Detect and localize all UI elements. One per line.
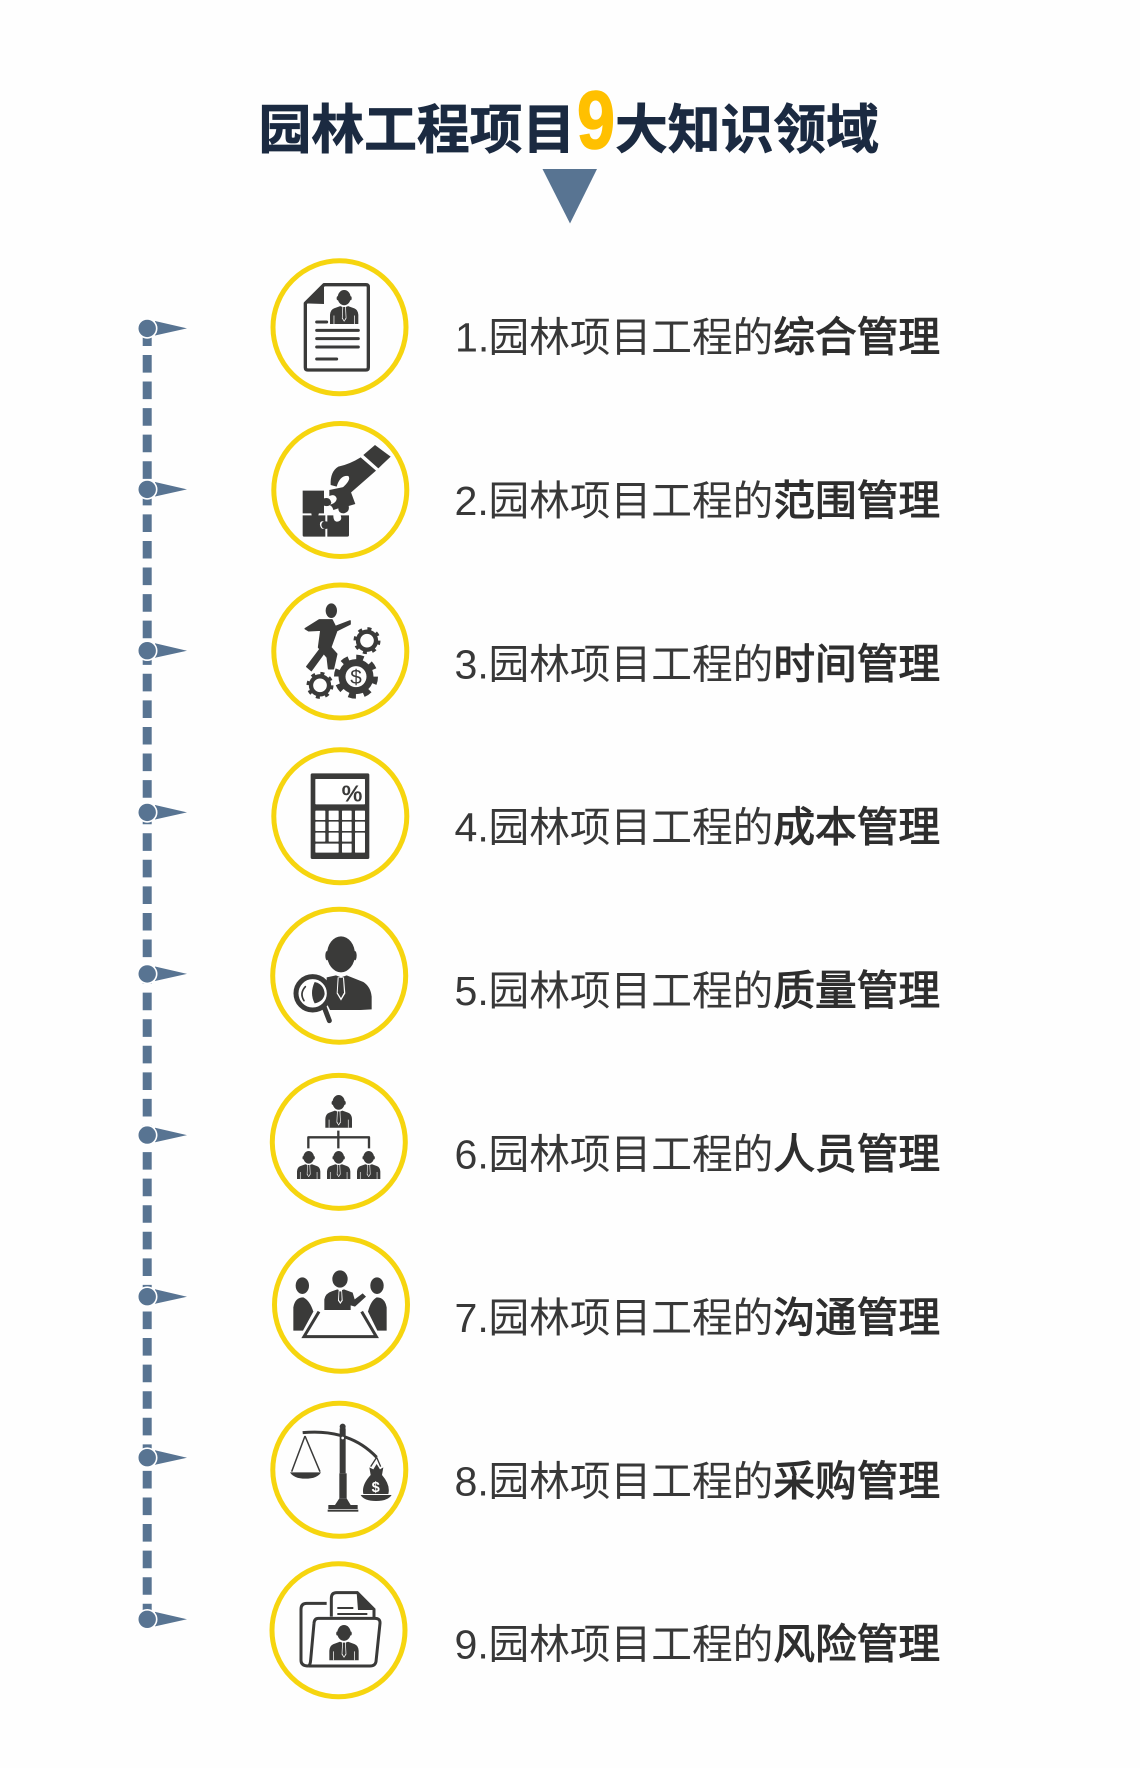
timeline [138, 319, 187, 1629]
list item 7: 园林项目工程的 [488, 1295, 773, 1341]
list item 5: 园林项目工程的 [488, 968, 773, 1014]
list item 6: 园林项目工程的 [488, 1132, 773, 1178]
title: 园林工程项目 [258, 88, 575, 164]
list item 8: 采购管理 [773, 1457, 940, 1504]
list item 7: 7. [454, 1295, 489, 1341]
list item 5: 质量管理 [773, 967, 940, 1014]
list item 6: 人员管理 [773, 1130, 940, 1178]
title: 大知识领域 [615, 88, 879, 164]
marker 5 [138, 964, 187, 983]
icon: team hierarchy [297, 1095, 380, 1179]
marker 2 [138, 480, 187, 499]
circle rings [272, 261, 408, 1697]
list item 1: 园林项目工程的 [488, 314, 773, 360]
title arrow [542, 169, 597, 224]
marker 3 [138, 641, 187, 660]
list item 5: 5. [454, 968, 489, 1014]
list item 9: 9. [454, 1622, 489, 1668]
marker 9 [138, 1610, 187, 1629]
list item 3: 园林项目工程的 [488, 641, 773, 687]
icon: scale with money bag [290, 1424, 392, 1512]
list item 1: 综合管理 [773, 314, 940, 360]
list item 8: 园林项目工程的 [488, 1458, 773, 1504]
icon: resume document [305, 284, 368, 370]
title: 9 [577, 75, 615, 166]
list item 9: 园林项目工程的 [488, 1622, 773, 1668]
marker 6 [138, 1126, 187, 1145]
list item 8: 8. [454, 1458, 489, 1504]
list item 2: 园林项目工程的 [488, 478, 773, 524]
icon: hand placing puzzle piece [303, 445, 391, 537]
list item 2: 2. [454, 478, 489, 524]
icon: runner and gears [305, 603, 379, 697]
icon: scale with money bag: $ [372, 1480, 380, 1496]
list item 2: 范围管理 [773, 477, 940, 524]
list item 6: 6. [454, 1132, 489, 1178]
list item 3: 3. [454, 641, 489, 687]
icon: meeting table [293, 1270, 387, 1337]
marker 1 [138, 319, 187, 338]
icon: calculator: % [342, 781, 363, 807]
list item 4: 园林项目工程的 [488, 805, 773, 851]
list item 7: 沟通管理 [773, 1294, 940, 1341]
list item 9: 风险管理 [773, 1621, 940, 1668]
icon: quality inspector [296, 936, 372, 1021]
icon: calculator [311, 773, 369, 859]
title [258, 75, 879, 166]
list item 1: 1. [455, 314, 489, 360]
marker 7 [138, 1287, 187, 1306]
list item 4: 4. [454, 805, 489, 851]
list item 3: 时间管理 [773, 640, 940, 687]
marker 8 [138, 1448, 187, 1467]
marker 4 [138, 803, 187, 822]
icon: personnel folder [301, 1593, 380, 1666]
icon: runner and gears: $ [350, 666, 362, 689]
list item 4: 成本管理 [773, 804, 940, 851]
